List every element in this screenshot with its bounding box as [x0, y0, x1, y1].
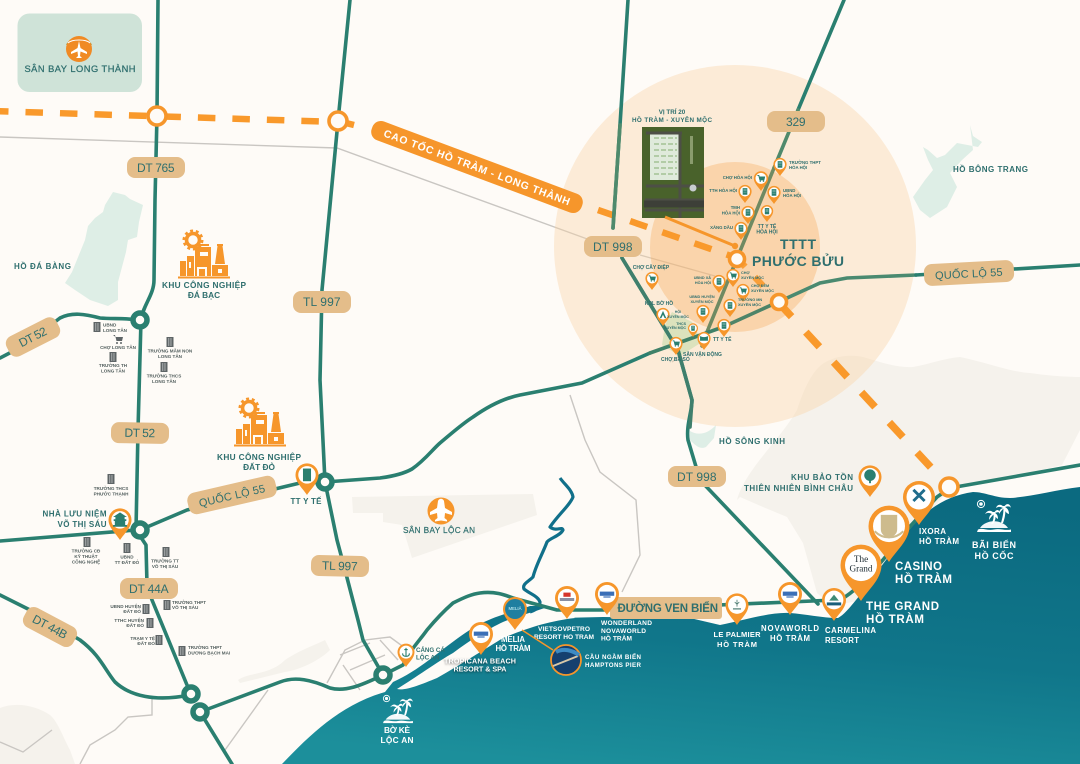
landmarks Đất Đỏ: UBND	[120, 554, 134, 560]
pin: TT Y tế	[713, 319, 732, 343]
road label: Quốc lộ 55 west: QUỐC LỘ 55	[197, 481, 267, 510]
landmarks Long Tân: LONG TÂN	[158, 353, 183, 359]
pin: Nhà lưu niệm Võ Thị Sáu: NHÀ LƯU NIỆM	[42, 510, 107, 518]
pin: Trường THPT Hòa Hội	[773, 158, 821, 176]
road label: DT 765	[127, 157, 185, 178]
pin: Xăng dầu: XĂNG DẦU	[710, 225, 733, 230]
title: TTTT Phước Bửu: TTTT	[780, 236, 816, 252]
landmarks Đất Đỏ: TRẠM Y TẾ	[130, 635, 155, 641]
industrial park: Đất Đỏ: ĐẤT ĐỎ	[243, 461, 275, 472]
pin: Tropicana	[444, 622, 516, 674]
pin: Carmelina: CARMELINA	[825, 626, 876, 635]
pin: Melia	[496, 597, 530, 653]
pin: Nhà lưu niệm Võ Thị Sáu: VÕ THỊ SÁU	[58, 520, 107, 529]
pin: Novaworld	[761, 582, 819, 643]
road label: Quốc lộ 55 east: QUỐC LỘ 55	[935, 265, 1003, 282]
pin: UBND huyện Xuyên Mộc	[689, 294, 715, 323]
pin: TT Y tế Hòa Hội	[756, 205, 778, 236]
pin: The Grand: HỒ TRÀM	[866, 613, 924, 626]
road label: DT 44A: DT 44A	[129, 582, 169, 596]
pin: Hội Xuyên Mộc and THCS: XUYÊN MỘC	[667, 314, 689, 319]
pin: Vietsovpetro	[534, 586, 594, 641]
industrial park: Đất Đỏ	[217, 399, 301, 472]
pin: The Grand: The	[854, 554, 868, 564]
pin: Chợ Hòa Hội	[723, 171, 768, 191]
pin: Cảng cá Lộc An: LỘC AN	[416, 654, 440, 662]
pointer line	[665, 217, 735, 246]
pin: Trường MN Xuyên Mộc: XUYÊN MỘC	[738, 302, 761, 307]
sea	[282, 487, 1080, 764]
road label: Quốc lộ 55 east	[923, 260, 1015, 286]
road label: DT 765: DT 765	[137, 161, 175, 175]
landmarks Đất Đỏ: PHƯỚC THẠNH	[94, 490, 129, 496]
pin: Novaworld: HỒ TRÀM	[770, 633, 810, 643]
pin: Sân vận động: SÂN VẬN ĐỘNG	[683, 350, 722, 358]
landmarks Long Tân: TRƯỜNG MẦM NON	[148, 346, 193, 354]
icon: Bờ kè Lộc An: LỘC AN	[380, 734, 414, 745]
pin: TT Y tế: TT Y TẾ	[713, 336, 732, 343]
icon: Bãi biển Hồ Cốc	[972, 500, 1016, 561]
pin: Chợ Bà Sổ: CHỢ BÀ SỔ	[661, 356, 690, 363]
landmarks Đất Đỏ: TRƯỜNG THCS	[94, 484, 128, 491]
pin: Khu bảo tồn Bình Châu: KHU BẢO TỒN	[791, 472, 853, 482]
zone circles	[554, 65, 916, 427]
pin: Chợ đêm Xuyên Mộc: XUYÊN MỘC	[751, 288, 774, 293]
road label: DT 44B: DT 44B	[30, 612, 70, 642]
landmarks Đất Đỏ: TRƯỜNG THPT	[172, 598, 206, 605]
pin: Carmelina	[822, 588, 876, 645]
pin: TT Y tế Hòa Hội: TT Y TẾ	[758, 223, 777, 230]
airport: Sân bay Lộc An	[403, 498, 475, 535]
pin: TMH Hòa Hội: TMH	[731, 205, 740, 210]
river	[524, 478, 573, 612]
pin: Chợ Bà Sổ	[661, 337, 690, 363]
icon: Bãi biển Hồ Cốc: BÃI BIỂN	[972, 539, 1016, 550]
pin: KDL Bờ Hồ	[645, 299, 673, 326]
pin: TTH Hòa Hội: TTH HÒA HỘI	[709, 188, 737, 193]
pin: TMH Hòa Hội: HÒA HỘI	[722, 210, 740, 216]
industrial park: Đá Bạc: ĐÁ BẠC	[188, 290, 220, 300]
pin: Ixora	[903, 481, 959, 546]
pin: Chợ Xuyên Mộc: XUYÊN MỘC	[741, 275, 764, 280]
pin: Trường MN Xuyên Mộc	[723, 297, 762, 317]
panel: Sân bay Long Thành	[18, 14, 142, 92]
title: Vị trí 20: HỒ TRÀM - XUYÊN MỘC	[632, 114, 712, 124]
callout: Cầu ngầm biển Hamptons Pier: HAMPTONS PIER	[585, 662, 642, 669]
road label: TL 997 lower	[311, 555, 369, 577]
landmarks Long Tân: TRƯỜNG TH	[99, 361, 128, 368]
lake label: Hồ Đá Bàng: HỒ ĐÁ BÀNG	[14, 261, 71, 271]
pin: TMH Hòa Hội	[722, 205, 755, 224]
pin: Khu bảo tồn Bình Châu	[744, 465, 882, 497]
site plan location	[632, 107, 738, 249]
pin: Melia: HỒ TRÀM	[496, 643, 530, 653]
pin: Vietsovpetro: VIETSOVPETRO	[538, 626, 590, 633]
road label: TL 997 lower: TL 997	[322, 559, 358, 573]
road label: DT 52	[111, 422, 169, 444]
landmarks Long Tân: LONG TÂN	[101, 368, 126, 374]
title: Vị trí 20: VỊ TRÍ 20	[659, 107, 686, 116]
icon: Bờ kè Lộc An	[380, 695, 414, 745]
pin: Casino Hồ Tràm: HỒ TRÀM	[895, 573, 952, 586]
pin: The Grand: Grand	[849, 563, 873, 573]
road label: DT 52: DT 52	[124, 426, 156, 440]
orange junction nodes	[148, 107, 958, 496]
road label: DT 998 north: DT 998	[593, 240, 633, 254]
pin: Novaworld: NOVAWORLD	[761, 624, 819, 633]
pin: Melia: MELIA	[501, 635, 525, 644]
pin: Le Palmier: HỒ TRÀM	[717, 639, 757, 649]
industrial park: Đá Bạc: KHU CÔNG NGHIỆP	[162, 279, 246, 290]
landmarks Đất Đỏ: UBND HUYỆN	[110, 602, 142, 609]
lake label: Hồ Bông Trang: HỒ BÔNG TRANG	[953, 164, 1028, 174]
landmarks Đất Đỏ: ĐẤT ĐỎ	[123, 608, 141, 614]
pin: Chợ Xuyên Mộc: CHỢ	[741, 271, 750, 275]
land patches	[0, 356, 1080, 764]
pin: Hội Xuyên Mộc and THCS: THCS	[676, 322, 687, 326]
lake label: Hồ Sông Kinh: HỒ SÔNG KINH	[719, 436, 785, 446]
pin: Vietsovpetro: RESORT HO TRAM	[534, 634, 594, 641]
teal junction rings	[133, 313, 390, 719]
landmarks Đất Đỏ: TRƯỜNG TT	[151, 556, 179, 564]
lake: Hồ Đá Bàng	[65, 192, 143, 306]
landmarks Đất Đỏ: TT ĐẤT ĐỎ	[115, 559, 140, 565]
pin: Cảng cá Lộc An: CẢNG CÁ	[416, 647, 445, 654]
pin: Trường MN Xuyên Mộc: TRƯỜNG MN	[738, 297, 762, 302]
callout: Cầu ngầm biển Hamptons Pier	[522, 630, 642, 675]
aerial photo	[642, 127, 704, 218]
road label: DT 998 south: DT 998	[677, 470, 717, 484]
pin: TT Y tế Đất Đỏ: TT Y TẾ	[290, 496, 322, 506]
road label: TL 997 upper	[293, 291, 351, 313]
icon: Bãi biển Hồ Cốc: HỒ CỐC	[974, 550, 1014, 561]
pin: Ixora: IXORA	[919, 527, 946, 536]
pin: UBND huyện Xuyên Mộc: XUYÊN MỘC	[690, 299, 714, 304]
pin: Chợ Hòa Hội: CHỢ HÒA HỘI	[723, 175, 752, 180]
road label: 329	[767, 111, 825, 132]
road label: Đường ven biển	[610, 597, 722, 619]
pin: Wonderland Novaworld	[595, 582, 652, 642]
icon: airport logo	[66, 36, 92, 62]
pin: Casino Hồ Tràm: CASINO	[895, 561, 942, 573]
title: TTTT Phước Bửu: PHƯỚC BỬU	[752, 252, 844, 269]
pin: Le Palmier: LE PALMIER	[714, 630, 761, 639]
pin: Hội Xuyên Mộc and THCS: XUYÊN MỘC	[664, 325, 686, 330]
airport: Sân bay Lộc An: SÂN BAY LỘC AN	[403, 525, 475, 535]
road label: DT 998 north	[584, 236, 642, 257]
pin: UBND Hòa Hội	[767, 186, 801, 204]
landmarks Đất Đỏ: DƯƠNG BẠCH MAI	[188, 650, 230, 656]
pin: Tropicana: RESORT & SPA	[454, 664, 506, 674]
pin: TT Y tế Đất Đỏ	[290, 463, 322, 506]
pin: UBND Hòa Hội: UBND	[783, 188, 795, 193]
title: TTTT Phước Bửu	[752, 236, 844, 269]
expressway dashes	[0, 111, 949, 487]
pin: Nhà lưu niệm Võ Thị Sáu	[42, 508, 132, 540]
landmarks Đất Đỏ: CÔNG NGHỆ	[72, 558, 100, 564]
road label: Đường ven biển: ĐƯỜNG VEN BIỂN	[618, 602, 718, 615]
pin: Le Palmier	[714, 593, 761, 649]
pin: Cảng cá Lộc An	[398, 644, 445, 667]
industrial park: Đá Bạc	[162, 231, 246, 300]
pin: Sân vận động	[683, 332, 722, 358]
grey secondary roads	[0, 137, 715, 764]
landmarks Đất Đỏ: ĐẤT ĐỎ	[137, 640, 155, 646]
road label: Quốc lộ 55 west	[186, 474, 278, 516]
pin: UBND Hòa Hội: HÒA HỘI	[783, 193, 801, 198]
landmarks Đất Đỏ	[72, 474, 230, 656]
landmarks Đất Đỏ: TRƯỜNG THPT	[188, 643, 222, 650]
landmarks Long Tân: CHỢ LONG TÂN	[100, 344, 137, 350]
pin: UBND xã Hòa Hội: UBND XÃ	[694, 275, 711, 280]
industrial park: Đất Đỏ: KHU CÔNG NGHIỆP	[217, 451, 301, 462]
pin: Khu bảo tồn Bình Châu: THIÊN NHIÊN BÌNH CHÂU	[744, 484, 853, 493]
pin: Xăng dầu	[710, 222, 748, 240]
landmarks Long Tân: LONG TÂN	[103, 327, 128, 333]
title: Vị trí 20	[632, 107, 712, 124]
landmarks Đất Đỏ: TRƯỜNG CĐ	[72, 546, 101, 554]
road segments inside Phước Bửu zone	[613, 110, 1080, 427]
landmarks Long Tân: UBND	[103, 322, 117, 328]
pin: Wonderland Novaworld: NOVAWORLD	[601, 628, 646, 635]
road label: TL 997 upper: TL 997	[303, 295, 341, 309]
landmarks Đất Đỏ: KỸ THUẬT	[74, 553, 98, 559]
landmarks Đất Đỏ: ĐẤT ĐỎ	[126, 622, 144, 628]
landmarks Long Tân	[94, 322, 193, 384]
pin: Tropicana: TROPICANA BEACH	[444, 656, 516, 666]
pin: Melia: MELIÃ	[509, 606, 522, 611]
road label: DT 44A	[120, 578, 178, 599]
pin: KDL Bờ Hồ: KDL BỜ HỒ	[645, 299, 673, 307]
pin: TTH Hòa Hội	[709, 185, 752, 203]
landmarks Đất Đỏ: VÕ THỊ SÁU	[152, 563, 179, 569]
pin: Wonderland Novaworld: HỒ TRÀM	[601, 632, 632, 642]
pin: Chợ Xuyên Mộc	[726, 269, 764, 287]
landmarks Long Tân: LONG TÂN	[152, 378, 177, 384]
pin: Chợ Cây Điệp: CHỢ CÂY ĐIỆP	[633, 263, 670, 271]
landmarks Long Tân: TRƯỜNG THCS	[147, 372, 181, 378]
pin: Hội Xuyên Mộc and THCS	[664, 309, 698, 337]
pin: Trường THPT Hòa Hội: TRƯỜNG THPT	[789, 160, 821, 165]
pin: Wonderland Novaworld: WONDERLAND	[601, 620, 652, 627]
expressway label: CAO TỐC HỒ TRÀM - LONG THÀNH	[382, 126, 572, 208]
pin: Casino Hồ Tràm	[868, 506, 952, 586]
pin: Chợ Cây Điệp	[633, 263, 670, 290]
pin: Chợ đêm Xuyên Mộc	[736, 283, 774, 302]
road label: DT 52 upper-left	[3, 314, 63, 360]
pin: UBND xã Hòa Hội: HÒA HỘI	[695, 280, 711, 285]
callout: Cầu ngầm biển Hamptons Pier: CẦU NGẦM BIỂN	[585, 654, 642, 661]
landmarks Đất Đỏ: TTHC HUYỆN	[114, 616, 145, 623]
pin: Trường THPT Hòa Hội: HÒA HỘI	[789, 165, 807, 170]
road label: DT 44B	[20, 604, 80, 650]
road label: DT 52 upper-left: DT 52	[16, 324, 50, 350]
lake: Hồ Sông Kinh	[690, 425, 716, 448]
road label: 329: 329	[786, 115, 806, 129]
pin: Hội Xuyên Mộc and THCS: HỘI	[675, 309, 681, 314]
landmarks Đất Đỏ: VÕ THỊ SÁU	[172, 604, 199, 610]
lake: Hồ Bông Trang	[913, 125, 982, 218]
pin: Ixora: HỒ TRÀM	[919, 536, 959, 546]
icon: Bờ kè Lộc An: BỜ KÈ	[384, 724, 410, 735]
panel: Sân bay Long Thành: SÂN BAY LONG THÀNH	[24, 64, 136, 74]
pin: Carmelina: RESORT	[825, 636, 859, 645]
pin: UBND huyện Xuyên Mộc: UBND HUYỆN	[689, 294, 715, 299]
pin: Chợ đêm Xuyên Mộc: CHỢ ĐÊM	[751, 283, 769, 288]
pin: The Grand: THE GRAND	[866, 601, 939, 613]
pin: The Grand	[840, 545, 939, 626]
pin: TT Y tế Hòa Hội: HÒA HỘI	[756, 228, 778, 236]
road label: DT 998 south	[668, 466, 726, 487]
pin: UBND xã Hòa Hội	[694, 275, 726, 293]
sand spit	[397, 606, 575, 689]
